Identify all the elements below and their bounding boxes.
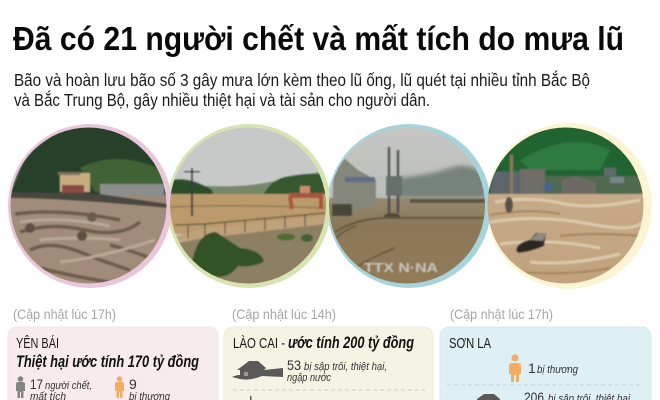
province and estimate: LÀO CAI - [233,335,285,352]
dead and missing count [30,376,92,400]
injured count: bị thương [537,364,579,376]
photo: Lào Cai flooded road [329,128,485,284]
houses damaged count: bị sập trôi, thiệt hại, [304,361,387,373]
icon: flooded house [232,361,283,380]
ring: yellow [486,123,652,289]
icon: orange person [509,354,521,382]
injured count [129,376,171,400]
panel: Lào Cai [224,327,433,400]
photo: Sơn La flash flood [488,128,644,284]
update time: Yên Bái: (Cập nhật lúc 17h) [13,306,116,322]
dead and missing count: 17 [30,376,43,392]
province name: YÊN BÁI [16,335,59,352]
houses damaged count [287,357,387,384]
province and estimate: ước tính 200 tỷ đồng [288,334,414,352]
icon: flooded house [477,394,500,400]
houses damaged count: ngập nước [287,372,331,384]
damage estimate: Thiệt hại ước tính 170 tỷ đồng [16,353,199,371]
intro text: Bão và hoàn lưu bão số 3 gây mưa lớn kèm theo lũ ống, lũ quét tại nhiều tỉnh Bắc Bộ [14,69,590,90]
icon: grey person [16,376,25,398]
province name: SƠN LA [449,336,491,352]
photo: flooded bridge [170,128,326,284]
dead and missing count: người chết, [45,380,92,392]
ring: pink [8,124,172,288]
intro text: và Bắc Trung Bộ, gây nhiều thiệt hại và tài sản cho người dân. [14,89,430,110]
icon: next item marker [250,396,252,400]
houses damaged count: 53 [287,357,301,373]
photo: Yên Bái flood [10,128,166,284]
intro text [14,69,590,110]
province and estimate [233,334,414,352]
injured count: 1 [528,360,536,376]
update time: Lào Cai: (Cập nhật lúc 14h) [232,306,336,322]
panel: Sơn La [440,327,651,400]
update time: Sơn La: (Cập nhật lúc 17h) [450,306,553,322]
panel: Yên Bái [8,327,218,400]
injured count: 9 [129,376,137,392]
ring: teal [327,124,491,288]
injured count [528,360,579,376]
houses damaged count [524,389,630,400]
watermark: TTX N·NA [364,260,439,275]
ring: green [167,124,331,288]
icon: orange person [115,376,124,398]
